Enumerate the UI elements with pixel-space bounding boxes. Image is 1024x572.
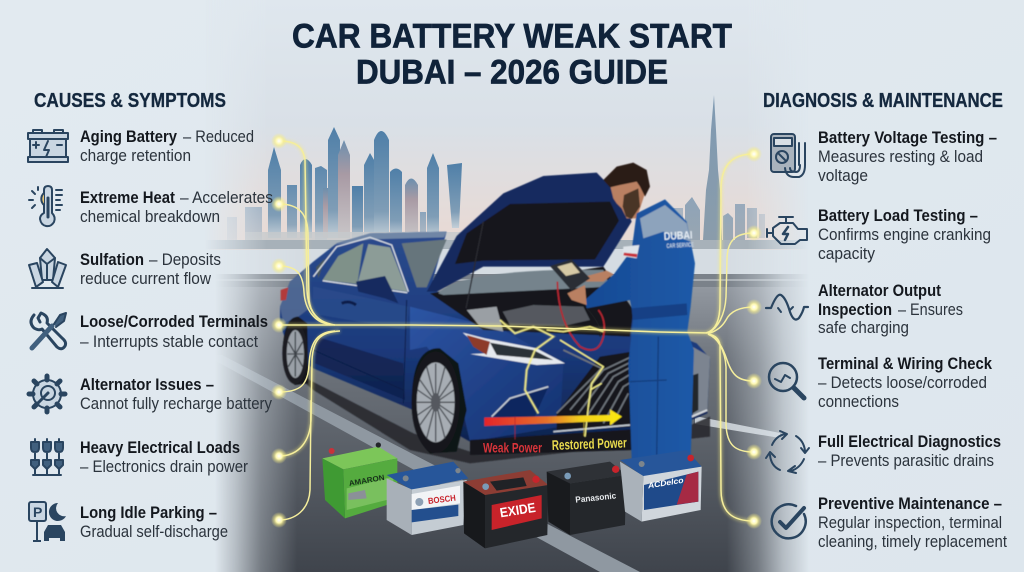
side mirror xyxy=(356,276,398,303)
door lower reflection xyxy=(315,337,405,400)
water xyxy=(246,249,770,274)
item: preventive maintenance xyxy=(772,494,1007,551)
text: alternator output inspection: safe charging xyxy=(818,318,909,337)
panel: diagnosis and maintenance xyxy=(763,90,1007,551)
text: alternator output inspection: Alternator Output xyxy=(818,281,941,300)
battery: Bosch xyxy=(387,462,468,535)
item: heavy electrical loads xyxy=(31,438,248,476)
diagnostic tablet xyxy=(550,259,590,291)
icon: wrench and screwdriver xyxy=(31,313,66,349)
icon: gear with wrench xyxy=(29,376,65,412)
title: DUBAI – 2026 GUIDE xyxy=(356,54,668,92)
icon: magnifier xyxy=(769,363,804,398)
text: aging battery: Aging Battery xyxy=(80,127,177,146)
item: terminal and wiring check xyxy=(769,354,992,411)
icon: battery xyxy=(28,130,68,162)
skyline base haze xyxy=(245,232,461,240)
item: battery voltage testing xyxy=(771,128,997,185)
heading: causes and symptoms: CAUSES & SYMPTOMS xyxy=(34,90,226,112)
front bumper dark band xyxy=(470,429,633,455)
back lettering: DUBAI xyxy=(664,230,693,243)
front fender xyxy=(410,307,563,442)
battery: Exide xyxy=(463,470,548,548)
text: preventive maintenance: Preventive Maintenance – xyxy=(818,494,1002,513)
roof highlight xyxy=(333,232,447,245)
shoulder yoke xyxy=(640,205,691,242)
battery: ACDelco: ACDelco xyxy=(646,476,684,490)
item: sulfation xyxy=(29,249,221,288)
icon: circular arrows xyxy=(766,431,809,473)
beard xyxy=(623,188,640,219)
title xyxy=(292,18,732,92)
car body xyxy=(280,232,710,442)
text: heavy electrical loads: Heavy Electrical Loads xyxy=(80,438,240,457)
icon: thermometer and sun xyxy=(29,186,62,226)
text: alternator output inspection: Inspection xyxy=(818,300,892,319)
grille xyxy=(557,352,632,430)
item: battery load testing xyxy=(767,206,991,263)
power labels xyxy=(483,434,627,456)
item: extreme heat xyxy=(29,186,273,226)
text: heavy electrical loads: – Electronics drain power xyxy=(80,457,248,476)
battery: Bosch: BOSCH xyxy=(427,493,456,506)
text: loose or corroded terminals: – Interrupts stable contact xyxy=(80,332,258,351)
text: terminal and wiring check: – Detects loose/corroded xyxy=(818,373,987,392)
item: alternator output inspection xyxy=(766,281,963,337)
bumper trim xyxy=(492,387,630,432)
sleeve badge xyxy=(623,245,639,258)
text: extreme heat: Extreme Heat xyxy=(80,188,175,207)
hair xyxy=(603,163,650,197)
hands xyxy=(578,271,613,282)
text: extreme heat: – Accelerates xyxy=(180,188,273,207)
text: sulfation: reduce current flow xyxy=(80,269,212,288)
battery: Panasonic: Panasonic xyxy=(575,490,617,505)
icon: waveform xyxy=(766,295,808,320)
label: restored power: Restored Power xyxy=(552,434,627,453)
silver front corner xyxy=(683,342,710,417)
text: aging battery: charge retention xyxy=(80,146,191,165)
battery lineup xyxy=(322,442,702,548)
road xyxy=(218,287,804,572)
car and mechanic illustration xyxy=(280,163,710,463)
icon: multimeter xyxy=(771,134,805,177)
rear wheel xyxy=(283,317,308,385)
panel: causes and symptoms xyxy=(28,90,273,541)
text: terminal and wiring check: Terminal & Wiring Check xyxy=(818,354,992,373)
power arrow xyxy=(484,409,622,426)
text: sulfation: – Deposits xyxy=(149,250,221,269)
item: aging battery xyxy=(28,127,254,165)
text: battery voltage testing: Battery Voltage Testing – xyxy=(818,128,997,147)
open hood xyxy=(427,173,632,292)
skyline left xyxy=(227,127,462,245)
text: long idle parking: Long Idle Parking – xyxy=(80,503,217,522)
text: aging battery: – Reduced xyxy=(183,127,254,146)
text: battery load testing: Battery Load Testing – xyxy=(818,206,978,225)
icon: parking, moon and car: P xyxy=(33,504,42,520)
text: long idle parking: Gradual self-discharge xyxy=(80,522,228,541)
icon: parking, moon and car xyxy=(29,502,66,541)
glow under connector lines xyxy=(279,141,754,521)
text: battery load testing: Confirms engine cranking xyxy=(818,225,991,244)
text: extreme heat: chemical breakdown xyxy=(80,207,220,226)
scene: water and road xyxy=(218,249,804,572)
icon: engine xyxy=(767,217,807,244)
rear quarter reflection xyxy=(280,268,312,323)
text: loose or corroded terminals: Loose/Corroded Terminals xyxy=(80,312,268,331)
item: alternator issues xyxy=(29,375,272,413)
text: battery voltage testing: Measures resting & load xyxy=(818,147,983,166)
item: loose or corroded terminals xyxy=(31,312,268,351)
icon: plugs xyxy=(31,439,63,475)
battery: Amaron: AMARON xyxy=(348,473,386,488)
item: full electrical diagnostics xyxy=(766,431,1001,473)
sky xyxy=(222,107,790,250)
text: battery voltage testing: voltage xyxy=(818,166,868,185)
windshield xyxy=(402,239,447,287)
icon: check mark xyxy=(772,504,806,538)
mechanic xyxy=(567,163,695,460)
text: alternator issues: Cannot fully recharge battery xyxy=(80,394,272,413)
text: full electrical diagnostics: – Prevents parasitic drains xyxy=(818,451,994,470)
lower intake xyxy=(492,387,548,420)
lane markings xyxy=(205,355,640,572)
tester cables xyxy=(557,282,604,350)
side windows xyxy=(323,243,363,284)
car shadow xyxy=(290,370,710,463)
text: preventive maintenance: Regular inspection, terminal xyxy=(818,513,1002,532)
skyline right xyxy=(672,95,765,240)
hood strut xyxy=(466,222,483,308)
text: sulfation: Sulfation xyxy=(80,250,144,269)
coverall xyxy=(585,199,695,460)
battery: Amaron xyxy=(322,442,397,518)
scene: Dubai skyline xyxy=(214,95,800,250)
headlight xyxy=(463,333,565,365)
face xyxy=(610,182,645,218)
engine bay xyxy=(430,267,633,337)
text: alternator issues: Alternator Issues – xyxy=(80,375,214,394)
connector lines xyxy=(279,141,754,521)
window chrome and door lines xyxy=(313,237,408,293)
electric sparks xyxy=(500,320,603,437)
text: battery load testing: capacity xyxy=(818,244,875,263)
item: long idle parking xyxy=(29,502,228,541)
icon: crystals xyxy=(29,249,66,288)
text: alternator output inspection: – Ensures xyxy=(898,300,963,319)
title: CAR BATTERY WEAK START xyxy=(292,18,732,56)
text: full electrical diagnostics: Full Electrical Diagnostics xyxy=(818,432,1001,451)
battery: Panasonic xyxy=(547,462,627,535)
horizon band xyxy=(213,240,801,249)
battery: ACDelco xyxy=(620,450,702,522)
engine cover xyxy=(503,305,590,326)
text: terminal and wiring check: connections xyxy=(818,392,899,411)
front wheel xyxy=(412,348,467,453)
connector dots xyxy=(271,133,762,529)
mechanic: CAR SERVICE xyxy=(666,242,694,250)
arrow ticks xyxy=(514,417,516,439)
battery: Exide: EXIDE xyxy=(499,500,537,520)
label: weak power: Weak Power xyxy=(483,440,542,456)
